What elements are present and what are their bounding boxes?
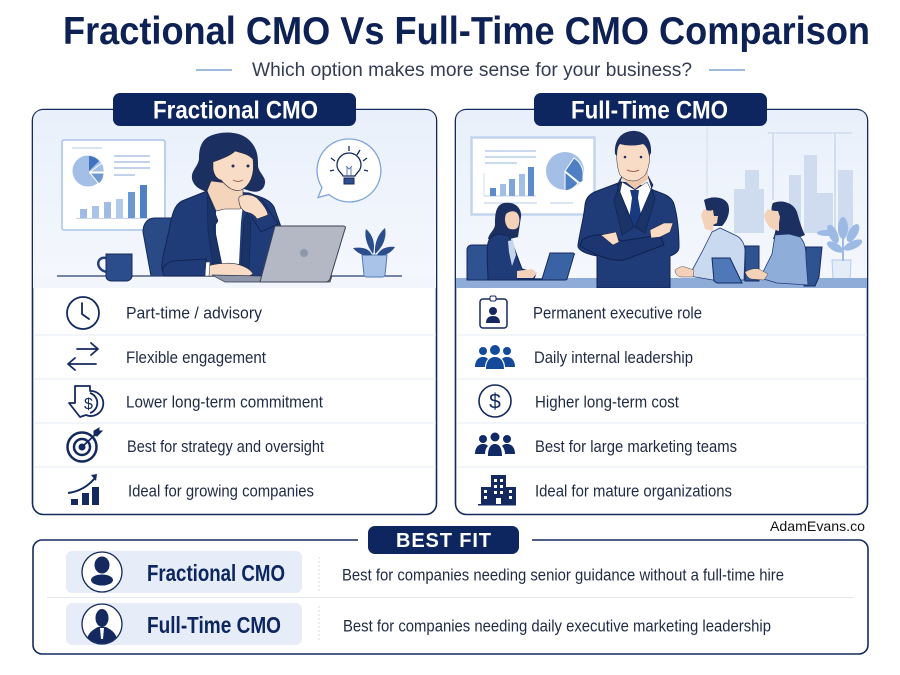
row: higher cost [479,385,679,417]
icon: person [82,552,122,592]
heading pill [113,93,356,126]
chart board [62,140,165,230]
row: flexible: Flexible engagement [126,348,266,367]
icon: team [475,345,515,369]
row: daily leadership [475,345,693,369]
row: mature organizations [478,475,732,506]
seated woman right [745,201,822,286]
icon: swap arrows [68,343,98,370]
row: part-time: Part-time / advisory [126,304,262,322]
illustration: full-time CMO with team [456,110,868,288]
panel: Fractional CMO [32,93,437,514]
row: full-time best fit: Best for companies needing daily executive marketing leadership [343,616,771,636]
row: flexible [68,343,266,370]
desk [456,278,868,288]
seated woman left [467,203,537,280]
row: mature organizations: Ideal for mature organizations [535,482,732,500]
row: full-time best fit [66,603,771,646]
plant [353,228,395,277]
icon: buildings [478,475,516,506]
row: growing [68,474,314,505]
row: permanent [480,296,702,328]
row: part-time [67,297,262,329]
row: lower commitment: Lower long-term commitment [126,392,323,412]
row: higher cost: Higher long-term cost [535,392,679,412]
row: strategy: Best for strategy and oversight [127,437,324,456]
icon: target [68,428,102,462]
laptop right [712,258,742,283]
icon: down arrow with dollar [69,386,103,417]
mug [98,254,132,281]
illustration: fractional CMO at laptop [33,110,437,288]
row: fractional best fit: Best for companies needing senior guidance without a full-time hire [342,566,784,584]
heading pill [534,93,767,126]
desk line [57,275,402,277]
row: daily leadership: Daily internal leadership [534,348,693,367]
city window [734,133,853,233]
icon: team [475,432,515,456]
heading pill: Full-Time CMO [571,96,728,124]
row: strategy [68,428,324,462]
row: permanent: Permanent executive role [533,304,702,322]
laptop [212,226,345,282]
icon: dollar circle [479,385,511,417]
icon: dollar circle: $ [489,390,501,414]
main executive [578,131,679,288]
heading pill: Fractional CMO [153,96,318,124]
row: lower commitment [69,386,323,417]
row: fractional best fit: Fractional CMO [147,560,285,586]
icon: ID badge [480,296,507,328]
row: large teams: Best for large marketing teams [535,437,737,456]
panel: best fit [33,526,868,654]
row: lower commitment: $ [84,396,93,413]
panel: Full-Time CMO [456,93,868,514]
chart board [472,138,594,214]
subtitle: Which option makes more sense for your business? [252,59,692,81]
row: large teams [475,432,737,456]
row: full-time best fit: Full-Time CMO [147,612,281,638]
icon: growth chart [68,474,99,505]
row: growing: Ideal for growing companies [128,482,314,500]
credit: AdamEvans.co [770,518,865,534]
laptop left [518,253,574,280]
icon: person in suit [82,604,122,646]
plant [817,217,864,280]
icon: clock [67,297,99,329]
heading pill [368,526,519,554]
seated man [675,197,759,281]
row dividers [457,335,867,467]
row: fractional best fit [66,551,784,593]
row dividers [34,335,436,467]
heading pill: BEST FIT [396,530,491,552]
woman [162,133,282,276]
lightbulb bubble [317,139,381,202]
chair [143,218,175,276]
